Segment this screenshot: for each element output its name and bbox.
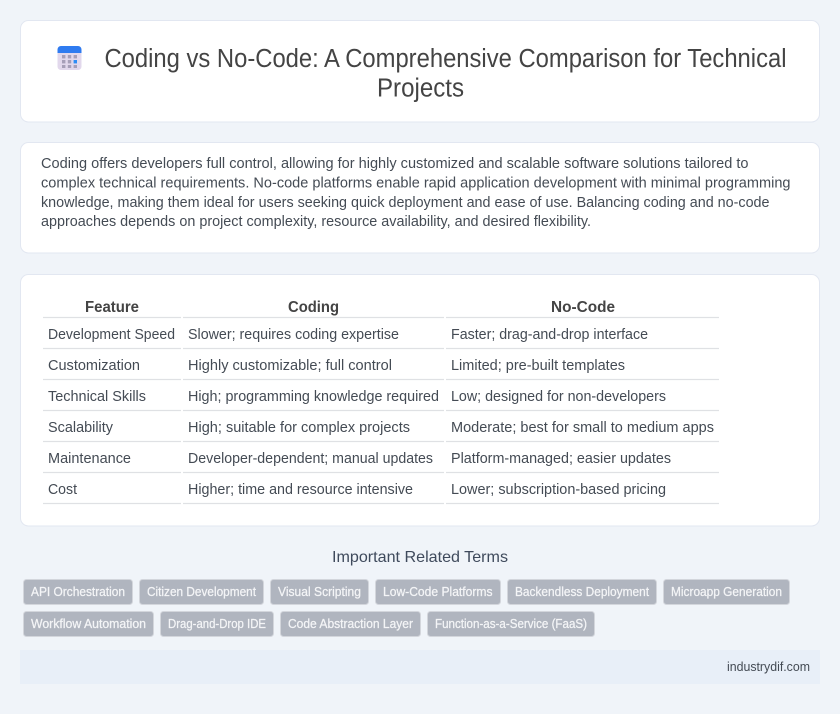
tags: related terms: Code Abstraction Layer xyxy=(288,617,413,631)
tags: related terms: Backendless Deployment xyxy=(515,585,650,599)
row: customization: Limited; pre-built templates xyxy=(451,358,625,374)
tags: related terms: Drag-and-Drop IDE xyxy=(168,617,266,631)
row: development speed: Faster; drag-and-drop interface xyxy=(451,327,648,343)
row: cost: Higher; time and resource intensive xyxy=(188,482,413,498)
row: maintenance xyxy=(48,451,671,467)
row: development speed: Development Speed xyxy=(48,327,175,343)
heading: related terms: Important Related Terms xyxy=(332,549,508,566)
row: cost: Lower; subscription-based pricing xyxy=(451,482,666,498)
tags: related terms: Function-as-a-Service (FaaS) xyxy=(435,617,587,631)
icon: calendar xyxy=(58,46,82,70)
row: customization: Highly customizable; full control xyxy=(188,358,392,374)
table header: No-Code xyxy=(551,299,615,316)
row: development speed: Slower; requires coding expertise xyxy=(188,327,399,343)
panel: comparison table xyxy=(20,274,820,526)
row: maintenance: Platform-managed; easier updates xyxy=(451,451,671,467)
row: customization xyxy=(48,358,625,374)
row: cost xyxy=(48,482,666,498)
row: development speed xyxy=(48,327,648,343)
row: scalability xyxy=(48,420,714,436)
row: customization: Customization xyxy=(48,358,140,374)
row: cost: Cost xyxy=(48,482,77,498)
title: Coding vs No-Code: A Comprehensive Comparison for Technical xyxy=(104,45,786,73)
title: Projects xyxy=(377,74,464,102)
panel: summary text xyxy=(20,142,820,253)
title xyxy=(104,45,786,102)
row: technical skills xyxy=(48,389,666,405)
row: technical skills: High; programming knowledge required xyxy=(188,389,439,405)
panel: summary text: knowledge, making them ideal for users seeking quick deployment and ease of use. Balancing coding and no-code xyxy=(41,195,770,211)
table header: Feature xyxy=(85,299,139,316)
footer xyxy=(20,650,820,684)
row: technical skills: Low; designed for non-developers xyxy=(451,389,666,405)
row: scalability: Moderate; best for small to medium apps xyxy=(451,420,714,436)
tags: related terms: API Orchestration xyxy=(31,585,125,599)
panel: summary text: approaches depends on project complexity, resource availability, and desired flexibility. xyxy=(41,214,591,230)
footer: industrydif.com xyxy=(727,660,810,674)
panel: summary text: Coding offers developers full control, allowing for highly customized and scalable software solutions tailored to xyxy=(41,156,748,172)
table header xyxy=(85,299,615,316)
tags: related terms: Workflow Automation xyxy=(31,617,146,631)
row: scalability: Scalability xyxy=(48,420,114,436)
row: scalability: High; suitable for complex projects xyxy=(188,420,410,436)
tags: related terms xyxy=(24,580,790,636)
panel: summary text: complex technical requirements. No-code platforms enable rapid application development with minimal programming xyxy=(41,176,790,192)
tags: related terms: Visual Scripting xyxy=(278,585,361,599)
table header: Coding xyxy=(288,299,339,316)
panel: title card xyxy=(20,20,820,122)
row: technical skills: Technical Skills xyxy=(48,389,146,405)
row: maintenance: Maintenance xyxy=(48,451,131,467)
tags: related terms: Microapp Generation xyxy=(671,585,782,599)
tags: related terms: Citizen Development xyxy=(147,585,256,599)
tags: related terms: Low-Code Platforms xyxy=(383,585,492,599)
row: maintenance: Developer-dependent; manual updates xyxy=(188,451,433,467)
